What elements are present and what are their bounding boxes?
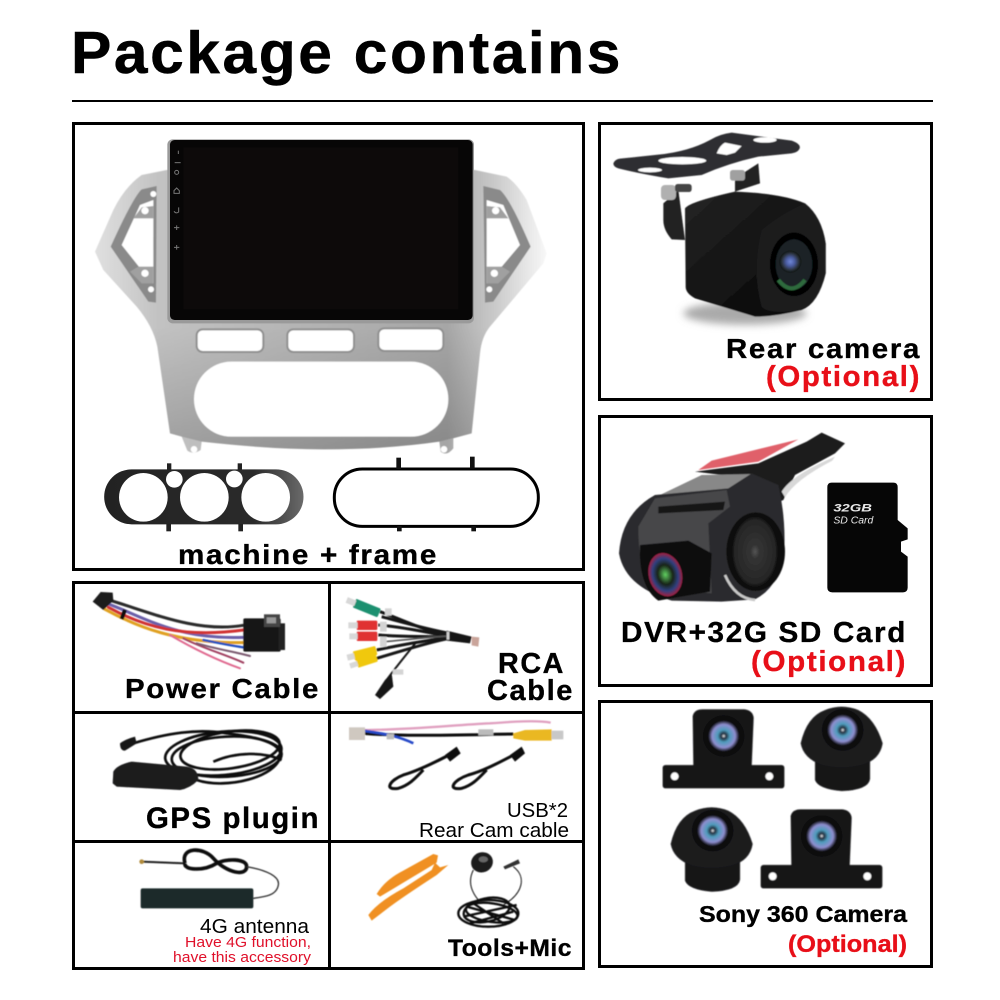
label: USB*2 rear cam cable: USB*2 (507, 800, 568, 822)
card text (833, 503, 874, 527)
icon: dash camera (619, 433, 908, 602)
icon: four cameras (663, 707, 883, 892)
note: 4G function: Have 4G function, (185, 934, 311, 951)
climate opening (194, 362, 448, 437)
label: optional: (Optional) (751, 646, 907, 678)
card text: 32GB (833, 503, 872, 515)
item: power cable image (93, 592, 285, 668)
label: DVR + 32G SD card: DVR+32G SD Card (621, 617, 907, 649)
note: 4G function: have this accessory (173, 949, 312, 966)
item: RCA cable image (345, 596, 479, 699)
item: GPS plugin image (113, 725, 283, 790)
label: Sony 360 camera: Sony 360 Camera (699, 901, 907, 927)
card text: SD Card (833, 516, 874, 527)
panel: cable grid (73, 582, 584, 968)
panel: cable grid: Cable (487, 675, 574, 707)
label: 4G antenna: 4G antenna (200, 916, 310, 938)
machine head unit and silver fascia (95, 139, 547, 454)
item: 4G antenna image (139, 850, 278, 908)
label: RCA cable: RCA (498, 648, 565, 680)
icon: rear camera (613, 133, 826, 325)
item: pry tools and mic image (368, 849, 521, 927)
panel: DVR + SD card (600, 416, 932, 686)
label: optional: (Optional) (766, 361, 921, 393)
gasket frame left (104, 463, 303, 531)
title: Package contains (71, 20, 623, 86)
panel: cable grid: Rear Cam cable (419, 820, 569, 842)
panel: Sony 360 camera (600, 702, 932, 966)
label: power cable: Power Cable (125, 673, 320, 704)
label: tools + mic: Tools+Mic (448, 935, 572, 962)
screen (167, 139, 474, 323)
label: GPS plugin: GPS plugin (146, 802, 320, 835)
side brackets (111, 186, 157, 303)
label: machine + frame: machine + frame (178, 539, 438, 570)
note: 4G function (173, 934, 312, 966)
panel: machine + frame (74, 124, 584, 570)
item: USB and rear cam cables image (349, 721, 563, 789)
vents (197, 328, 443, 352)
label: optional: (Optional) (788, 931, 907, 958)
gasket frame right (334, 457, 538, 531)
label: rear camera: Rear camera (726, 333, 921, 364)
panel: rear camera (600, 124, 932, 400)
